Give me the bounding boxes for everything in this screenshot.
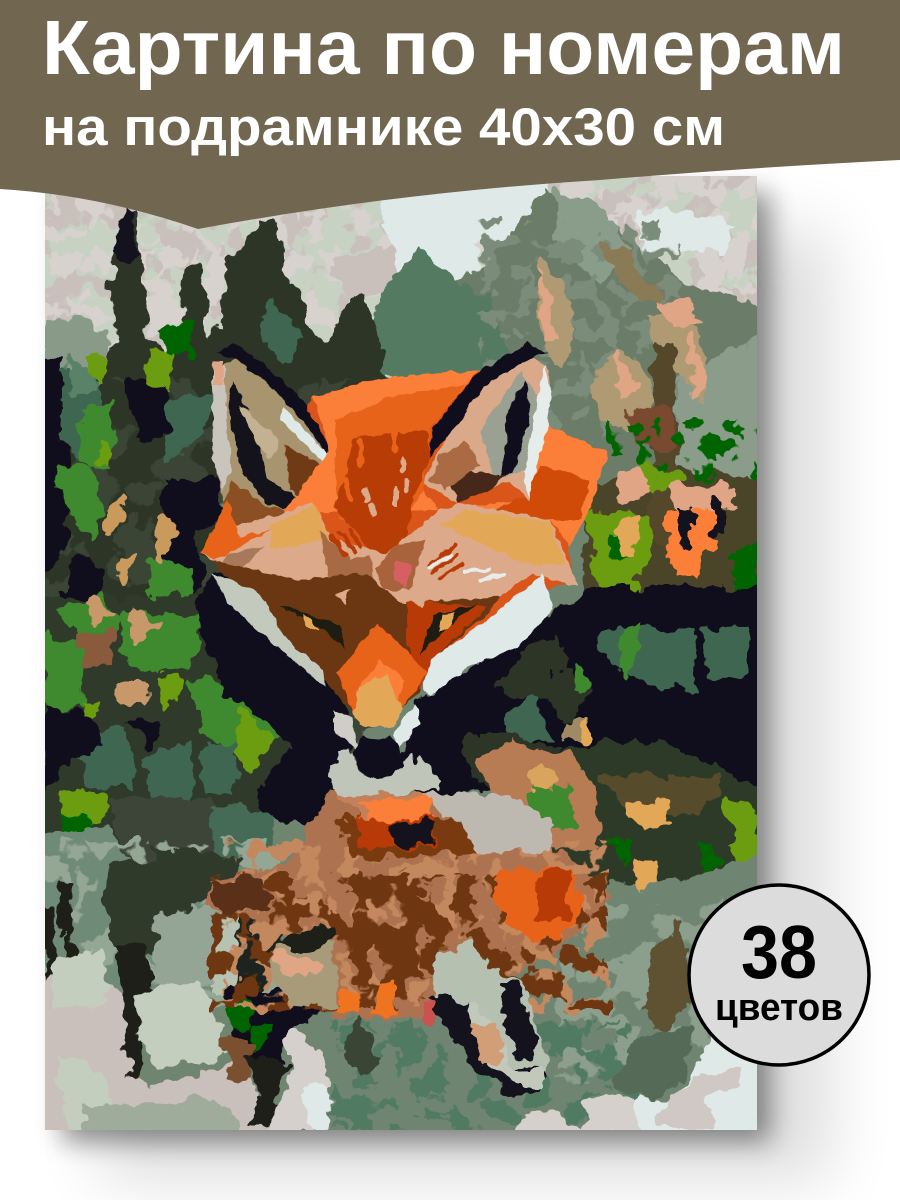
header band <box>0 0 900 229</box>
fox head <box>200 343 608 779</box>
sky and clouds <box>45 176 757 378</box>
olive and brown bank on the right <box>480 745 780 887</box>
right forest and trees <box>580 342 757 594</box>
painted landscape <box>45 176 757 1130</box>
right body fur <box>472 425 608 547</box>
white fur <box>213 573 325 687</box>
title: Картина по номерам <box>42 5 845 91</box>
whiskers <box>330 530 505 580</box>
eyes <box>280 605 475 655</box>
canvas shadow <box>62 192 830 1180</box>
dark forest under the right cheek <box>395 590 780 805</box>
left ear <box>212 343 333 537</box>
left dark forest <box>20 212 385 780</box>
badge: 38 colours <box>689 885 869 1065</box>
reflection of the fox <box>210 755 613 1015</box>
lower left water reflection of forest <box>45 824 280 1130</box>
mountains <box>373 186 757 486</box>
head base <box>296 371 608 651</box>
head top fur <box>283 372 477 513</box>
forehead <box>333 430 430 567</box>
right ear <box>423 343 552 503</box>
grey hill on the left <box>45 314 112 386</box>
badge: 38 colours: цветов <box>715 987 843 1029</box>
lower middle trees <box>225 913 350 1130</box>
mountain reflection <box>323 860 780 1140</box>
nose <box>337 623 427 713</box>
green mid forest on the left <box>20 600 290 880</box>
lower face <box>210 560 500 710</box>
badge: 38 colours: 38 <box>741 910 817 994</box>
reflected ear <box>424 945 545 1092</box>
cheek band <box>200 503 577 607</box>
painting canvas: fox and reflection <box>45 176 757 1130</box>
subtitle: на подрамнике 40х30 см <box>42 98 725 157</box>
central black void behind the head <box>200 570 350 835</box>
